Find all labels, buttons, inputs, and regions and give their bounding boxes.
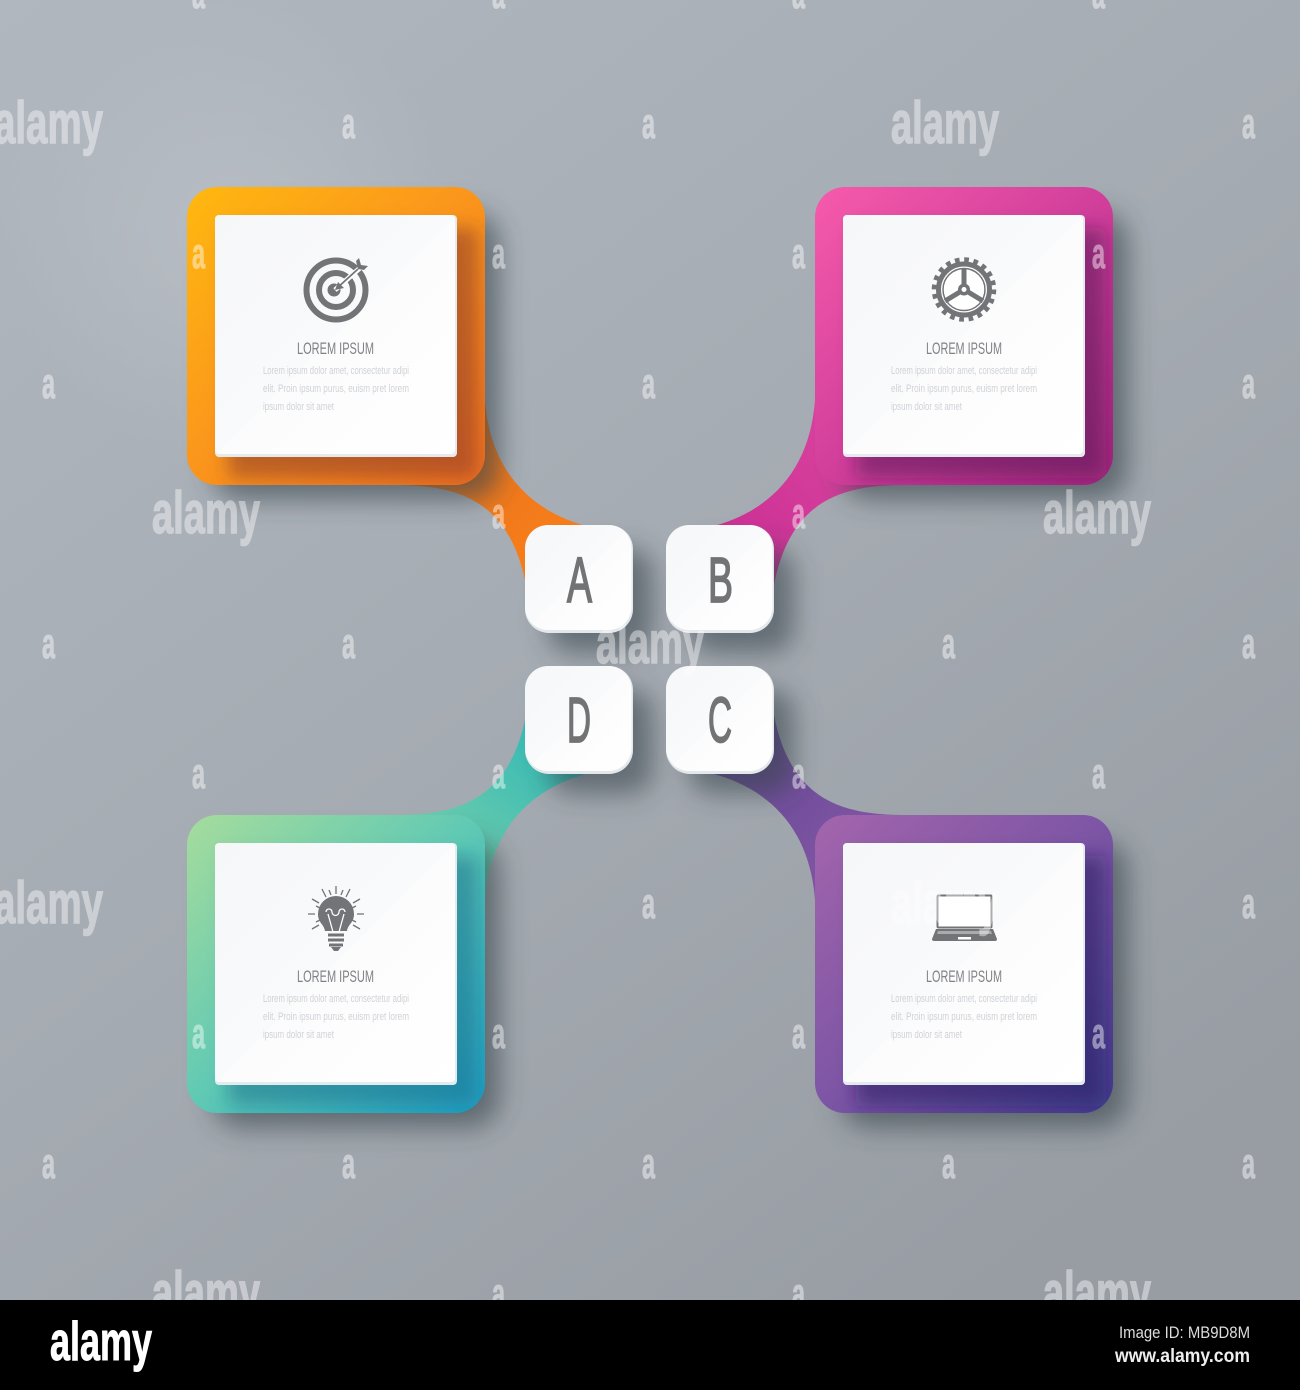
connector B: [710, 400, 900, 590]
watermarks: a: [1092, 230, 1106, 278]
watermarks: a: [192, 1010, 206, 1058]
watermarks: a: [1242, 1140, 1256, 1188]
connector D: [400, 710, 590, 900]
body text: Lorem ipsum dolor amet, consectetur adipi: [263, 993, 409, 1005]
button D: [525, 666, 633, 774]
icon: target: [306, 258, 368, 320]
body text: elit. Proin ipsum purus, euism pret lorem: [891, 383, 1037, 395]
panel B content: [843, 215, 1085, 457]
button B: B: [708, 544, 733, 616]
body text: ipsum dolor sit amet: [891, 401, 962, 413]
watermarks: a: [642, 100, 656, 148]
body text: elit. Proin ipsum purus, euism pret lorem: [263, 383, 409, 395]
watermarks: alamy: [891, 90, 999, 156]
watermarks: a: [492, 230, 506, 278]
button C: C: [708, 684, 732, 756]
body text: ipsum dolor sit amet: [263, 401, 334, 413]
panel D content: [215, 843, 457, 1085]
watermarks: a: [342, 1140, 356, 1188]
watermarks: a: [42, 360, 56, 408]
watermarks: a: [942, 620, 956, 668]
watermarks: alamy: [1043, 480, 1151, 546]
card shadows: [212, 212, 1128, 1128]
body text: [263, 365, 409, 413]
watermarks: a: [192, 230, 206, 278]
button D: D: [567, 684, 591, 756]
watermarks: a: [42, 620, 56, 668]
watermarks: a: [942, 1140, 956, 1188]
title: LOREM IPSUM: [297, 339, 374, 358]
watermarks: a: [642, 1140, 656, 1188]
connector A: [400, 400, 590, 590]
body text: ipsum dolor sit amet: [891, 1029, 962, 1041]
watermarks: a: [642, 880, 656, 928]
watermarks: a: [492, 1270, 506, 1318]
panel D frame: [187, 815, 485, 1113]
watermarks: a: [792, 1270, 806, 1318]
panel C frame: [815, 815, 1113, 1113]
button C: [666, 666, 774, 774]
watermarks: alamy: [596, 610, 704, 676]
watermarks: a: [492, 1010, 506, 1058]
watermarks: alamy: [1043, 1260, 1151, 1326]
watermarks: a: [192, 750, 206, 798]
watermarks: a: [1092, 1010, 1106, 1058]
watermarks: a: [1242, 620, 1256, 668]
body text: Lorem ipsum dolor amet, consectetur adipi: [891, 993, 1037, 1005]
website: www.alamy.com: [1114, 1346, 1250, 1367]
watermarks: a: [342, 620, 356, 668]
footer bar: [0, 1300, 1300, 1390]
title: LOREM IPSUM: [926, 967, 1002, 986]
body text: Lorem ipsum dolor amet, consectetur adipi: [891, 365, 1037, 377]
watermarks: a: [792, 490, 806, 538]
button A: A: [567, 544, 592, 616]
watermarks: a: [1092, 750, 1106, 798]
footer logo: alamy: [50, 1310, 152, 1372]
body text: [263, 993, 409, 1041]
body text: Lorem ipsum dolor amet, consectetur adipi: [263, 365, 409, 377]
watermarks: a: [492, 490, 506, 538]
connector C: [710, 710, 900, 900]
watermarks: a: [1242, 100, 1256, 148]
button B: [666, 525, 774, 633]
watermarks: a: [642, 360, 656, 408]
watermarks: a: [792, 1010, 806, 1058]
panel A content: [215, 215, 457, 457]
body text: elit. Proin ipsum purus, euism pret lorem: [891, 1011, 1037, 1023]
panel C content: [843, 843, 1085, 1085]
body text: elit. Proin ipsum purus, euism pret lorem: [263, 1011, 409, 1023]
icon: gear: [935, 260, 993, 318]
watermarks: a: [492, 750, 506, 798]
watermarks: a: [342, 100, 356, 148]
watermarks: alamy: [152, 480, 260, 546]
watermarks: a: [792, 750, 806, 798]
watermarks: a: [1242, 360, 1256, 408]
button shadows: [548, 548, 794, 794]
panel A frame: [187, 187, 485, 485]
icon: laptop: [932, 896, 997, 941]
button A: [525, 525, 633, 633]
watermarks: a: [42, 1140, 56, 1188]
body text: [891, 365, 1037, 413]
panel B frame: [815, 187, 1113, 485]
image id: Image ID: MB9D8M: [1119, 1323, 1250, 1342]
title: LOREM IPSUM: [926, 339, 1002, 358]
watermarks: a: [1242, 880, 1256, 928]
body text: ipsum dolor sit amet: [263, 1029, 334, 1041]
background glow: [0, 0, 520, 520]
body text: [891, 993, 1037, 1041]
watermarks: a: [792, 230, 806, 278]
icon: light bulb: [308, 886, 364, 951]
watermarks: alamy: [152, 1260, 260, 1326]
title: LOREM IPSUM: [297, 967, 374, 986]
watermarks: alamy: [891, 870, 999, 936]
